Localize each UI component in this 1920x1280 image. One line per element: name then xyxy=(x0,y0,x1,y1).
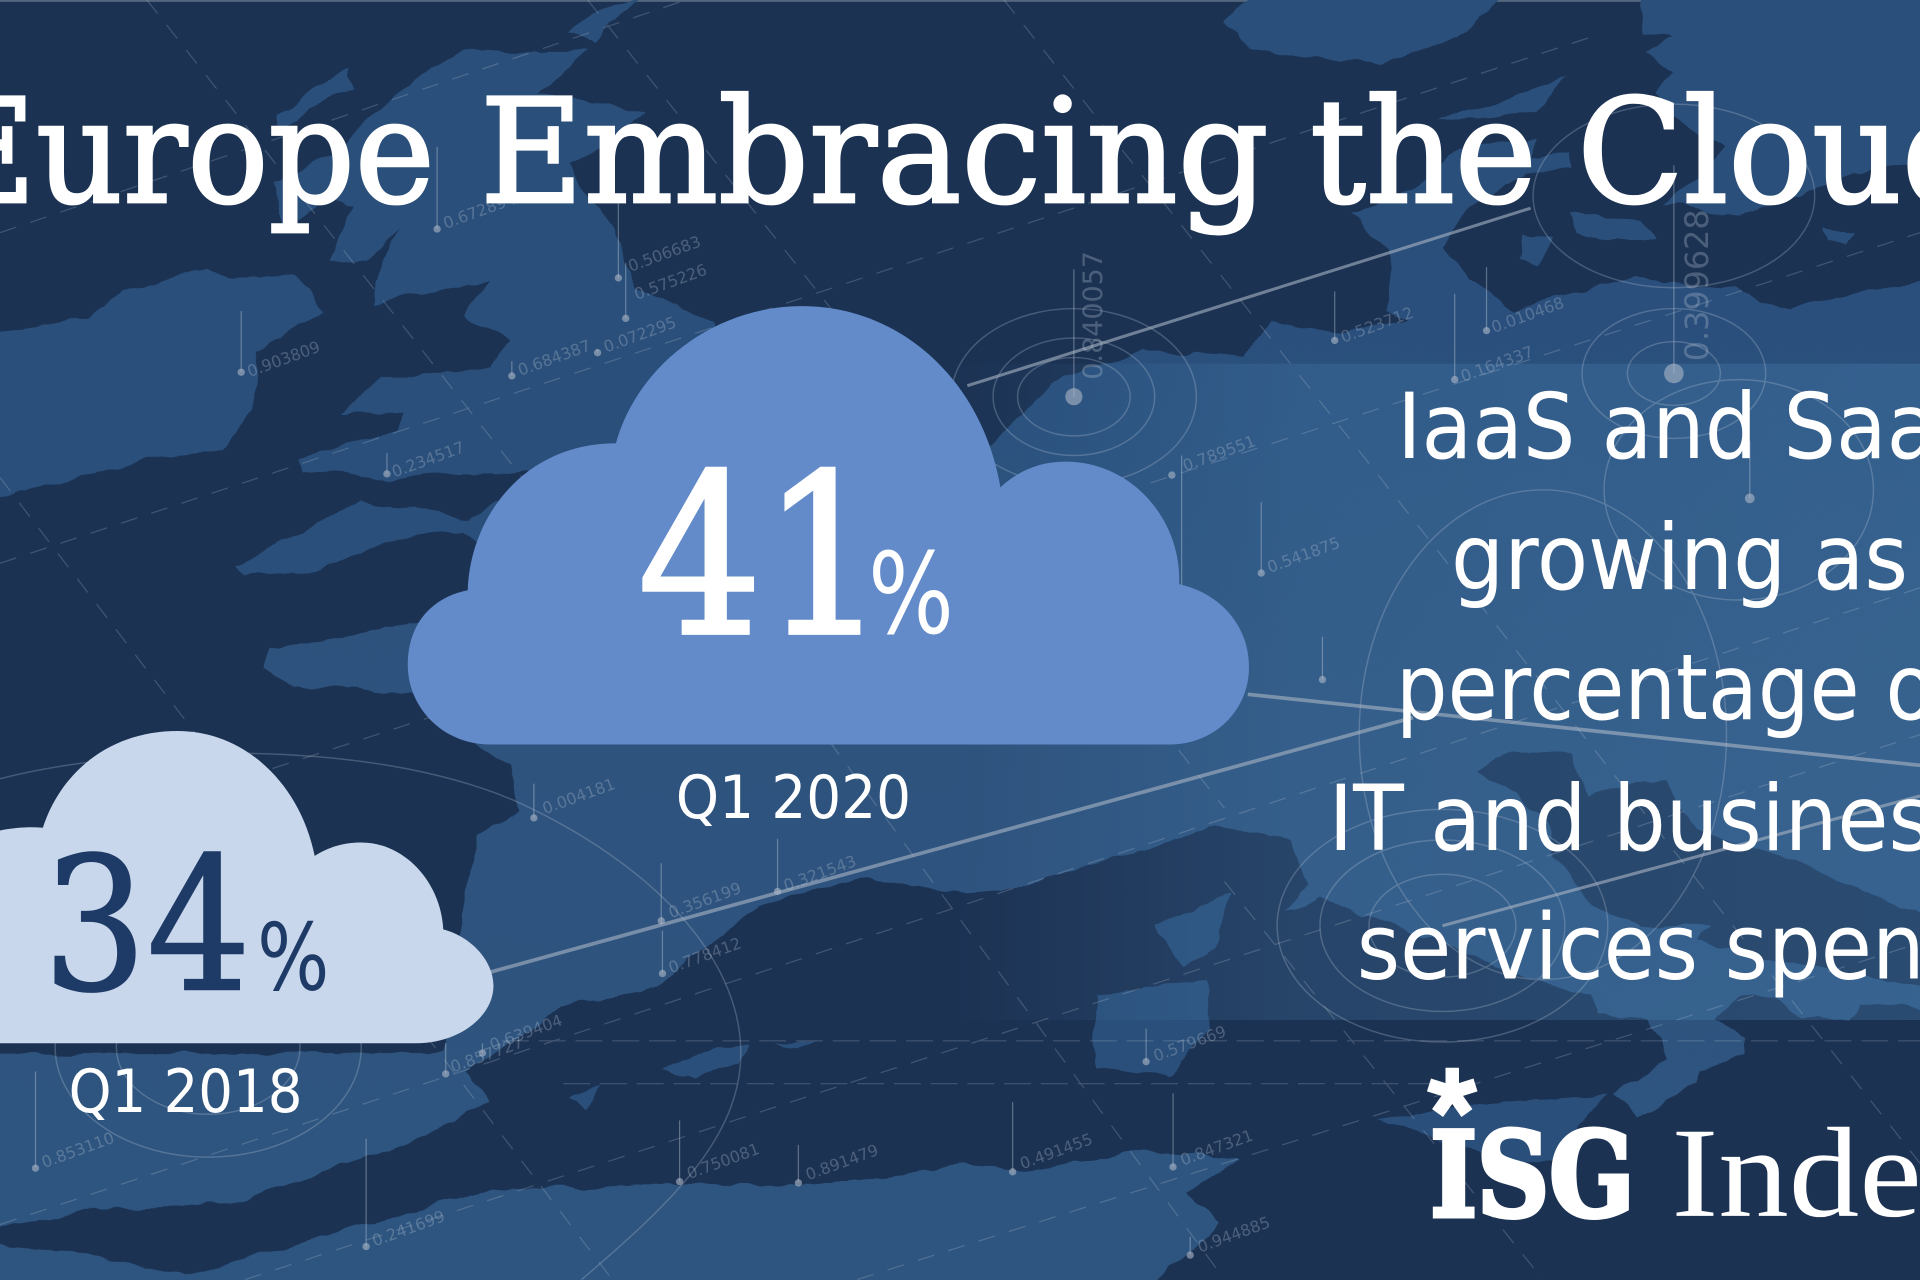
data ticks: 0.903809 xyxy=(245,337,322,381)
data ticks: 0.164337 xyxy=(1458,342,1536,386)
value 34%: % xyxy=(257,903,329,1011)
map: Hebrides islands xyxy=(276,0,643,132)
title: Embracing xyxy=(480,69,1269,237)
title: the xyxy=(1310,69,1537,237)
value 41%: % xyxy=(868,528,954,660)
logo asterisk xyxy=(1429,1068,1476,1113)
data ticks: 0.241699 xyxy=(370,1206,447,1250)
logo: ISG Index xyxy=(1429,1068,1920,1244)
data ticks: 0.857727 xyxy=(448,1033,526,1076)
data ticks xyxy=(32,147,1755,1259)
data ticks: 0.004181 xyxy=(540,774,618,818)
logo ISG wordmark: ISG xyxy=(1430,1106,1635,1244)
map: Channel strip xyxy=(233,490,514,576)
map: Norway xyxy=(1224,0,1529,64)
data ticks: 0.575226 xyxy=(632,260,709,304)
bright connector lines xyxy=(490,208,1920,972)
label: Q1 2020: Q1 2020 xyxy=(676,763,911,833)
data ticks: 0.010468 xyxy=(1489,293,1567,337)
value 41%: 41 xyxy=(638,428,887,686)
data ticks: 0.684387 xyxy=(515,336,593,380)
data ticks: 0.847321 xyxy=(1178,1126,1256,1169)
data ticks: 0.789551 xyxy=(1180,431,1258,475)
data ticks: 0.491455 xyxy=(1017,1129,1095,1173)
data ticks: 0.234517 xyxy=(389,437,467,481)
data ticks: 0.778412 xyxy=(666,933,744,977)
map: Danish islands xyxy=(1435,77,1858,263)
data ticks: 0.523712 xyxy=(1338,303,1416,347)
map: Great Britain xyxy=(276,51,735,490)
value 34%: 34 xyxy=(43,817,251,1033)
data ticks: 0.072295 xyxy=(601,313,679,356)
map: islands xyxy=(569,893,1610,1166)
data ticks: 0.321543 xyxy=(781,851,859,895)
text block: IaaS and SaaS statement xyxy=(1329,375,1920,1000)
data ticks: 0.541875 xyxy=(1265,533,1342,577)
cloud: Q1 2018 xyxy=(0,731,493,1043)
data ticks: 0.579669 xyxy=(1151,1022,1229,1065)
cloud shape 2018 xyxy=(0,731,493,1043)
data ticks: 0.399628 xyxy=(1678,209,1716,361)
title xyxy=(0,69,1920,237)
data ticks: 0.356199 xyxy=(666,878,744,922)
map: light data band xyxy=(955,364,1920,1020)
data ticks: 0.853110 xyxy=(39,1128,117,1172)
data ticks: 0.750081 xyxy=(684,1139,762,1183)
label: Q1 2018: Q1 2018 xyxy=(69,1057,302,1127)
data ticks: 0.506683 xyxy=(625,232,703,276)
cloud: Q1 2020 xyxy=(408,306,1249,744)
map: Sweden xyxy=(1643,0,1920,217)
map: Ireland xyxy=(0,269,324,502)
data ticks: 0.891479 xyxy=(803,1140,881,1184)
cloud shape 2020 xyxy=(408,306,1249,744)
map: Adriatic sea xyxy=(1478,753,1920,992)
data ticks: 0.840057 xyxy=(1078,251,1109,380)
data ticks: 0.672894 xyxy=(441,189,518,233)
data ticks: 0.639404 xyxy=(487,1011,565,1054)
data ticks: 0.944885 xyxy=(1195,1213,1273,1256)
map: Mediterranean sea xyxy=(0,828,1920,1280)
